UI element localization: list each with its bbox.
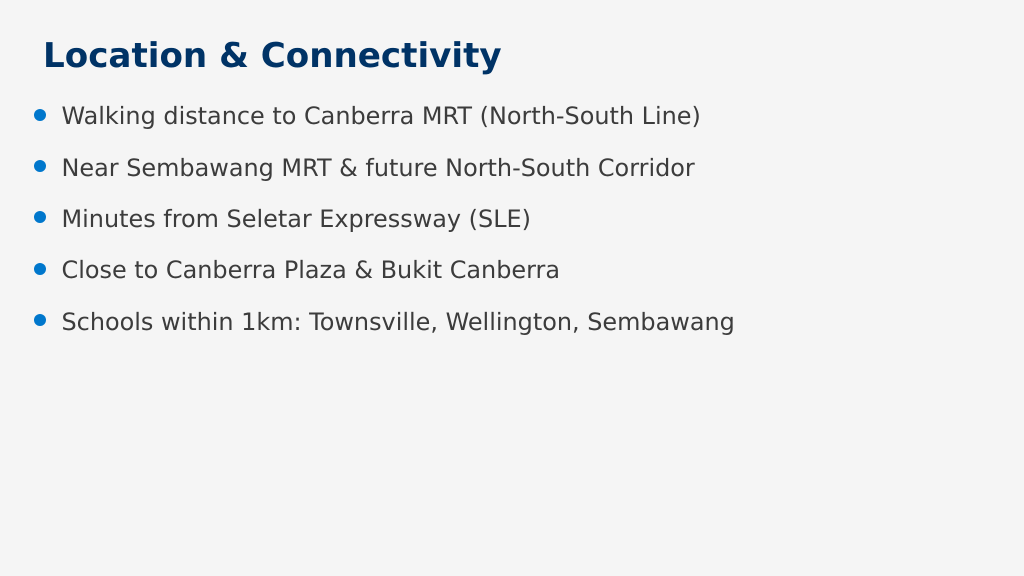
bullet item: Sembawang MRT: Near Sembawang MRT & future North-South Corridor	[62, 154, 695, 182]
bullet item: Canberra Plaza: Close to Canberra Plaza & Bukit Canberra	[62, 256, 560, 284]
bullet item: Canberra MRT: Walking distance to Canberra MRT (North-South Line)	[62, 102, 701, 130]
title: Location & Connectivity	[43, 36, 502, 76]
bullet item: Seletar Expressway: Minutes from Seletar Expressway (SLE)	[62, 204, 531, 232]
bullet item: Schools: Schools within 1km: Townsville, Wellington, Sembawang	[62, 308, 735, 336]
bullet list	[34, 102, 735, 336]
